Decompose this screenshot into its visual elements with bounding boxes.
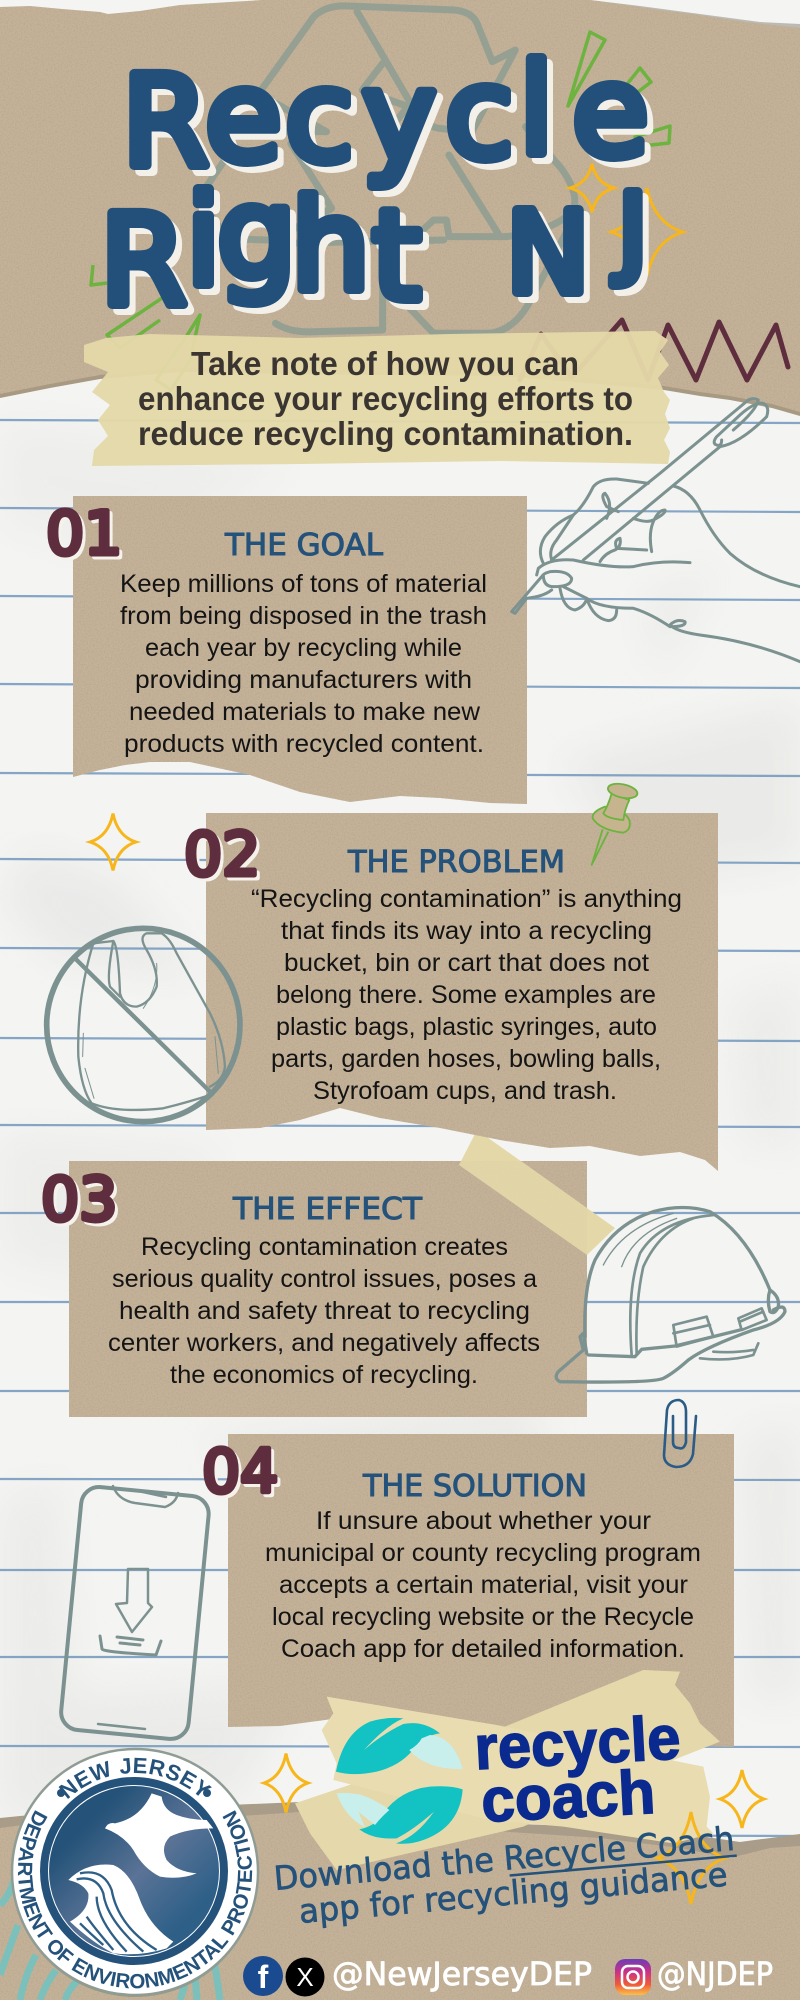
subtitle text: Take note of how you can: [191, 345, 579, 382]
icon: hard hat: [556, 1207, 785, 1382]
body text: the goal: products with recycled content.: [124, 730, 484, 758]
top kraft paper torn strip: [0, 0, 800, 416]
icon: paper clip: [664, 1400, 696, 1467]
seal arc text: New Jersey: NEW JERSEY: [58, 1758, 212, 1799]
social handle: NJ DEP: @NJDEP: [657, 1955, 773, 1993]
icon: crossed-out plastic bag: [47, 928, 240, 1122]
title: Right NJ: N: [506, 189, 590, 319]
logo: recycle coach wordmark: coach: [480, 1758, 657, 1836]
icon: Facebook: [243, 1956, 283, 1996]
recycling symbol outline: [204, 6, 577, 333]
subtitle text: enhance your recycling efforts to: [138, 380, 633, 417]
body text: the goal: needed materials to make new: [129, 698, 481, 726]
body text: the solution: Coach app for detailed information.: [281, 1635, 685, 1663]
body text: the problem: bucket, bin or cart that does not: [284, 949, 649, 977]
number 04: 04: [202, 1437, 278, 1507]
icon: gold sparkle left of logo: [264, 1754, 308, 1812]
seal: New Jersey DEP: [10, 1748, 260, 1997]
social handle: New Jersey DEP: @NewJerseyDEP: [332, 1955, 592, 1993]
logo tape cross: [295, 1670, 720, 1870]
body text: the solution: accepts a certain material, visit your: [279, 1571, 688, 1599]
body text: the effect: health and safety threat to recycling: [119, 1297, 530, 1325]
heading: the solution: THE SOLUTION: [362, 1469, 587, 1504]
body text: the effect: Recycling contamination creates: [141, 1233, 508, 1261]
download call to action: Download the Recycle Coach: [272, 1819, 736, 1898]
icon: large gold sparkle behind download text: [657, 1812, 725, 1904]
body text: the goal: Keep millions of tons of material: [120, 570, 487, 598]
teal arcs behind seal: [0, 1880, 220, 2000]
second line of call to action: app for recycling guidance: [297, 1855, 729, 1931]
icon: green accent sparks, upper right: [568, 32, 670, 146]
title: Right NJ: Right: [100, 162, 421, 334]
body text: the problem: “Recycling contamination” is anything: [251, 885, 682, 913]
title: Recycle: Recycle: [122, 38, 649, 195]
heading: the effect: THE EFFECT: [232, 1192, 423, 1227]
body text: the effect: serious quality control issues, poses a: [112, 1265, 537, 1293]
number 01: 01: [46, 499, 122, 569]
title: Right NJ: J: [612, 172, 648, 289]
body text: the effect: center workers, and negatively affects: [108, 1329, 540, 1357]
body text: the goal: providing manufacturers with: [135, 666, 472, 694]
body text: the goal: from being disposed in the trash: [120, 602, 487, 630]
number 03: 03: [41, 1165, 117, 1235]
heading: the problem: THE PROBLEM: [347, 845, 565, 880]
subtitle text: reduce recycling contamination.: [138, 415, 633, 452]
body text: the problem: plastic bags, plastic syringes, auto: [276, 1013, 657, 1041]
subtitle banner: [84, 331, 670, 466]
icon: gold sparkle left of panel two: [90, 814, 136, 870]
heading: the goal: THE GOAL: [224, 528, 383, 563]
icon: Instagram: [615, 1959, 651, 1995]
body text: the solution: If unsure about whether your: [316, 1507, 651, 1535]
panel: the goal: [46, 496, 527, 804]
icon: X: [286, 1958, 324, 1996]
body text: the problem: parts, garden hoses, bowling balls,: [271, 1045, 661, 1073]
icon: gold sparkle right of logo: [720, 1770, 764, 1828]
body text: the problem: belong there. Some examples are: [276, 981, 656, 1009]
body text: the problem: Styrofoam cups, and trash.: [313, 1077, 617, 1105]
body text: the effect: the economics of recycling.: [170, 1361, 478, 1389]
tape strip on panel three: [459, 1161, 587, 1255]
panel: the problem: [184, 813, 718, 1171]
icon: gold sparkle near title top: [570, 164, 614, 212]
icon: phone with download arrow: [60, 1485, 210, 1741]
panel: the solution: [202, 1434, 734, 1747]
seal bird and wave: [68, 1793, 213, 1954]
number 02: 02: [184, 820, 260, 890]
icon: push pin: [592, 781, 639, 865]
body text: the problem: that finds its way into a recycling: [281, 917, 652, 945]
logo: recycle coach wordmark: recycle: [473, 1703, 682, 1783]
body text: the solution: municipal or county recycling program: [265, 1539, 701, 1567]
icon: hand writing with pen: [512, 399, 800, 662]
body text: the solution: local recycling website or the Recycle: [272, 1603, 694, 1631]
tape strip over panel three: [459, 1130, 615, 1255]
seal arc text: Department of Environmental Protection: DEPARTMENT OF ENVIRONMENTAL PROTECTION: [18, 1810, 252, 1988]
icon: Facebook: f: [258, 1959, 269, 1995]
icon: maroon zigzag: [520, 320, 788, 380]
panel: the effect: [41, 1161, 587, 1417]
logo: recycle coach leaves: [336, 1718, 463, 1844]
body text: the goal: each year by recycling while: [145, 634, 462, 662]
icon: X: X: [296, 1962, 314, 1992]
download call to action: [272, 1819, 740, 1933]
underline: recycle coach: [510, 1856, 737, 1875]
icon: green accent sparks, lower left: [91, 265, 200, 390]
icon: gold sparkle beside J: [611, 188, 683, 276]
bottom kraft paper: [0, 1802, 800, 2000]
